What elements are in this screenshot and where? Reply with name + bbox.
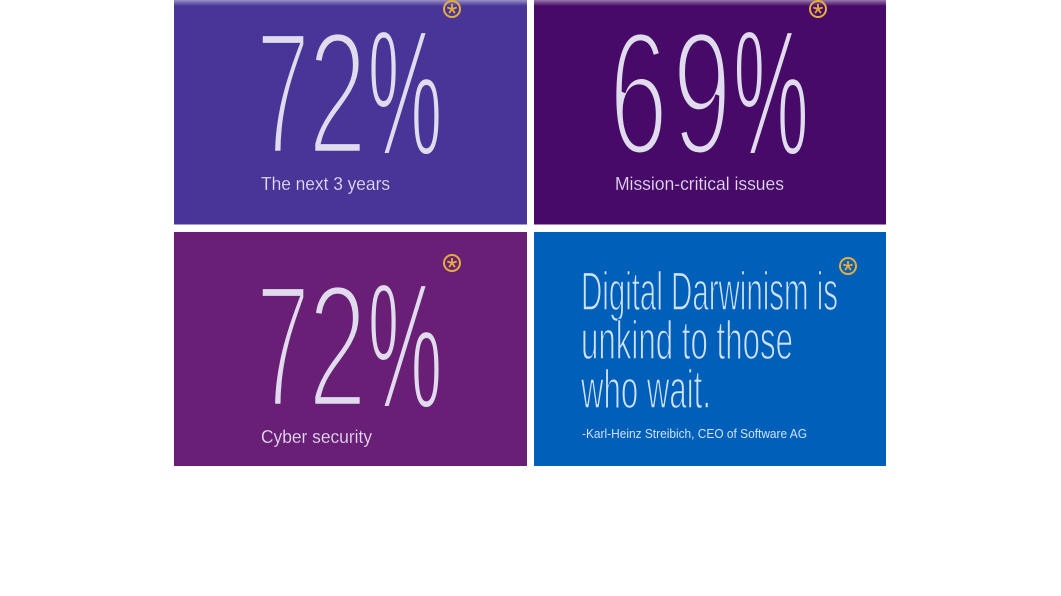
panel: the next 3 years xyxy=(174,0,527,224)
icon: asterisk badge xyxy=(444,255,460,271)
caption: the next 3 years: The next 3 years xyxy=(261,174,390,194)
quote text: Digital Darwinism is xyxy=(581,260,838,322)
stat: 69%: 9 xyxy=(672,0,732,192)
panel: cyber security: % xyxy=(368,246,442,447)
quote text: unkind to those xyxy=(581,309,793,371)
quote attribution: -Karl-Heinz Streibich, CEO of Software AG xyxy=(582,427,807,441)
stat: 72%: 7 xyxy=(256,249,310,445)
panel: mission-critical issues xyxy=(534,0,886,224)
quote text: who wait. xyxy=(580,358,711,420)
icon: asterisk badge xyxy=(840,258,856,274)
caption: mission-critical issues: Mission-critical issues xyxy=(615,174,784,194)
stat: 72%: 2 xyxy=(308,249,367,445)
icon: asterisk badge xyxy=(810,1,826,17)
quote text xyxy=(580,260,838,420)
stat: 72% xyxy=(256,0,442,194)
stat: 72%: 7 xyxy=(256,0,310,192)
panel: quote xyxy=(534,232,886,466)
panel: cyber security xyxy=(174,232,527,466)
icon: asterisk badge xyxy=(444,1,460,17)
stat: 69%: 6 xyxy=(609,0,668,192)
caption: cyber security: Cyber security xyxy=(261,427,372,447)
stat: 72%: 2 xyxy=(308,0,367,192)
stat: 72% xyxy=(256,246,442,447)
stat: 69% xyxy=(609,0,809,194)
